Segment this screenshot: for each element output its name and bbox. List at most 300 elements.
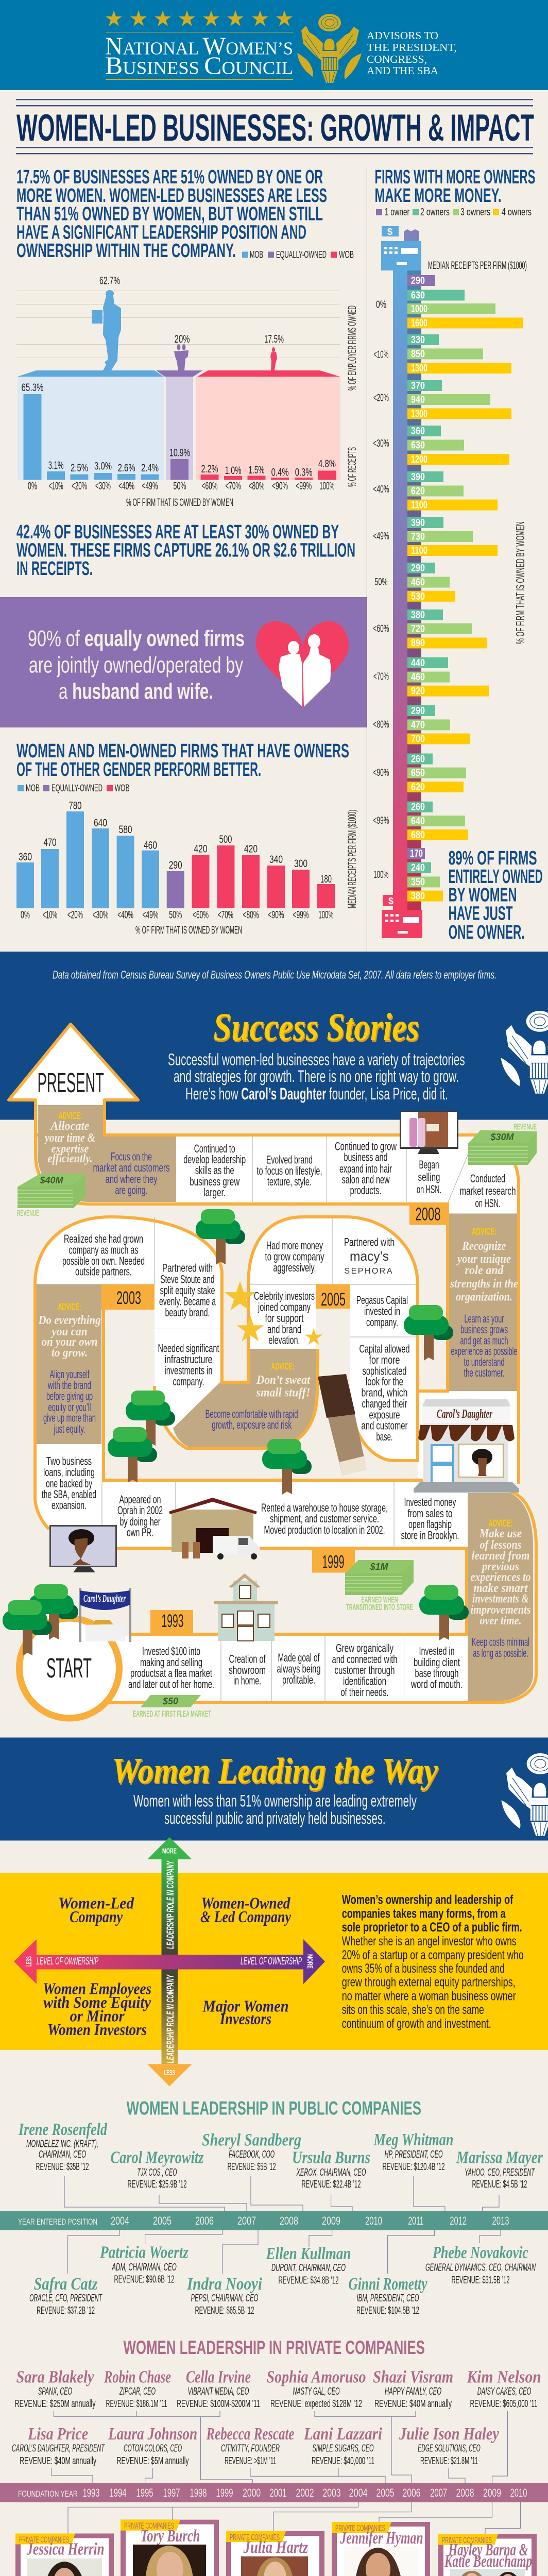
steps: bottom row: showroom <box>229 1664 266 1676</box>
x axis labels: <99% <box>296 480 312 492</box>
card: Julia Hartz <box>226 2531 339 2576</box>
timeline band: 2008 <box>456 2486 474 2499</box>
steps: second dome: aggressively. <box>273 1261 316 1274</box>
group labels: <99% <box>373 815 389 826</box>
heading: public companies: WOMEN LEADERSHIP IN PUBLIC COMPANIES <box>127 2098 421 2119</box>
year: 1999: 1999 <box>322 1552 344 1572</box>
bar values: 370 <box>411 380 425 392</box>
Kim Nelson <box>466 2368 541 2410</box>
x axis labels: <10% <box>49 480 63 492</box>
advice: allocate your time: and where they <box>105 1173 158 1185</box>
advice: recognize your role: role and <box>465 1264 504 1277</box>
timeline band: 2009 <box>322 2214 340 2227</box>
Ginni Rometty: IBM, PRESIDENT, CEO <box>356 2293 419 2304</box>
card: Hayley Barna and Katie Beauchamp: PRIVATE COMPANIES <box>442 2535 492 2545</box>
Rebecca Rescate: Rebecca Rescate <box>206 2425 295 2444</box>
x axis: <30% <box>93 909 108 921</box>
timeline band: 1997 <box>163 2486 180 2499</box>
icon: money stack $30M: $30M <box>490 1132 515 1142</box>
x axis labels: <20% <box>72 480 87 492</box>
bar values: 4.8% <box>318 458 336 470</box>
top row steps: on HSN. <box>475 1197 501 1210</box>
card: Jessica Herrin <box>15 2534 135 2576</box>
bar values: 440 <box>411 657 425 669</box>
icon: flea market stand <box>79 1588 131 1642</box>
advice: do everything: on your own <box>41 1335 98 1349</box>
Carol Meyrowitz: TJX COS., CEO <box>137 2167 177 2178</box>
bar values: 260 <box>411 753 425 765</box>
Safra Catz: Safra Catz <box>34 2275 98 2294</box>
steps: middle row <box>42 1455 459 1541</box>
pictogram: MOB figure: 62.7% <box>99 275 120 287</box>
card: Jennifer Hyman <box>332 2522 438 2576</box>
legend: owner counts: 4 owners <box>502 207 532 218</box>
Rebecca Rescate: CITIKITTY, FOUNDER <box>221 2443 280 2454</box>
bar values: 940 <box>411 394 425 405</box>
arrow: ownership axis: LEVEL OF OWNERSHIP <box>241 1956 302 1967</box>
intro text <box>168 1050 465 1103</box>
steps: first dome: Realized she had grown <box>64 1232 143 1245</box>
bar values: 700 <box>411 734 425 745</box>
steps: first dome: company. <box>173 1375 204 1388</box>
timeline band: 1993 <box>82 2486 100 2499</box>
group labels: <49% <box>373 531 389 542</box>
steps: first dome: evenly. Became a <box>159 1295 216 1308</box>
card: Julia Hartz: Julia Hartz <box>243 2538 309 2557</box>
intro text: Here’s how Carol’s Daughter founder, Lisa Price, did it. <box>185 1084 448 1103</box>
Robin Chase: ZIPCAR, CEO <box>119 2386 156 2397</box>
board panels <box>37 1105 533 1701</box>
chart: median receipts by number of owners <box>373 226 527 938</box>
quadrant labels: with Some Equity <box>43 1993 151 2011</box>
advice: don't sweat: small stuff! <box>256 1386 310 1400</box>
bar values: 390 <box>411 517 425 529</box>
bar values: 620 <box>411 485 425 497</box>
values <box>19 800 332 885</box>
pictogram: equally-owned couple <box>174 333 190 370</box>
advice: recognize your role: the customer. <box>464 1366 505 1379</box>
icon: trees <box>3 1209 469 1656</box>
advice: do everything: ADVICE: <box>58 1302 81 1313</box>
values: 580 <box>119 824 132 836</box>
steps: middle row: expansion. <box>52 1499 87 1512</box>
icon: white eagle seal <box>501 1011 548 1094</box>
steps: bottom row: base through <box>415 1667 458 1680</box>
steps: bottom row: identification <box>343 1675 386 1688</box>
bar values: 380 <box>411 609 425 621</box>
x axis labels: <40% <box>118 480 134 492</box>
Cella Irvine: VIBRANT MEDIA, CEO <box>187 2386 249 2397</box>
x axis: 50% <box>169 909 182 921</box>
group labels: <40% <box>373 484 389 495</box>
quadrant labels: Women Employees <box>43 1979 151 1998</box>
panel: husband and wife <box>0 597 367 727</box>
icon: money stack $1M: TRANSITIONED INTO STORE <box>346 1602 413 1612</box>
steps: second dome: invested in <box>364 1304 400 1318</box>
x axis labels: 100% <box>319 480 335 492</box>
timeline band: 2007 <box>430 2486 447 2499</box>
advisors text: THE PRESIDENT, <box>367 41 457 54</box>
Shazi Visram: REVENUE: $40M annually <box>374 2398 452 2410</box>
steps: middle row: own PR. <box>127 1526 153 1539</box>
icon: money $50 <box>133 1695 211 1719</box>
group labels: 50% <box>375 577 388 588</box>
values: 780 <box>69 800 81 812</box>
text block: 17.5% of businesses: MORE WOMEN. WOMEN-LED BUSINESSES ARE LESS <box>16 185 327 207</box>
Ellen Kullman <box>266 2244 351 2286</box>
icon: money stack $1M: EARNED WHEN <box>362 1595 398 1605</box>
top row steps: market research <box>459 1184 516 1197</box>
Sophia Amoruso: Sophia Amoruso <box>267 2368 366 2387</box>
steps: bottom row: in home. <box>233 1674 261 1687</box>
x axis: <99% <box>293 909 309 921</box>
advice: do everything: you can <box>50 1325 88 1338</box>
bar values: 390 <box>411 471 425 483</box>
light green bars <box>407 303 495 887</box>
values: 290 <box>169 859 182 871</box>
bar values: 1.5% <box>248 464 265 476</box>
x axis: <10% <box>43 909 57 921</box>
Laura Johnson: COTON COLORS, CEO <box>124 2443 182 2454</box>
steps: first dome: Steve Stoute and <box>161 1273 214 1286</box>
bar values: 530 <box>411 591 425 602</box>
year: 2003: 2003 <box>116 1288 141 1308</box>
year: 2003 <box>101 1284 155 1310</box>
steps: middle row: from sales to <box>408 1507 452 1520</box>
Julie Ison Haley: EDGE SOLUTIONS, CEO <box>418 2443 481 2454</box>
dividers <box>37 1137 517 1701</box>
advice: recognize your role: Learn as your <box>465 1312 504 1325</box>
group labels: <60% <box>373 623 389 634</box>
icon: flea market stand: Carol’s Daughter <box>83 1593 126 1604</box>
Robin Chase <box>104 2368 171 2410</box>
Rebecca Rescate: REVENUE: >$1M ’11 <box>225 2455 276 2467</box>
values: 420 <box>244 843 258 855</box>
group labels: <30% <box>373 438 389 449</box>
explanatory paragraph <box>342 1893 524 2031</box>
Sara Blakely: REVENUE: $250M annually <box>14 2398 96 2410</box>
advice: do everything: equity or you’ll <box>48 1401 91 1414</box>
top row steps: products. <box>350 1184 381 1197</box>
legend: ownership type 2 <box>18 783 130 794</box>
bar values: 640 <box>411 816 425 827</box>
Irene Rosenfeld: REVENUE: $35B ’12 <box>36 2161 89 2173</box>
values: 460 <box>144 840 157 851</box>
steps: second dome <box>254 1236 410 1443</box>
green bars <box>407 290 465 873</box>
text block: 42.4% of businesses: 42.4% OF BUSINESSES ARE AT LEAST 30% OWNED BY <box>16 521 339 543</box>
advice: make use of lessons: experiences to <box>471 1570 530 1584</box>
timeline band: 2004 <box>111 2214 129 2227</box>
Indra Nooyi: REVENUE: $65.5B ’12 <box>195 2305 254 2316</box>
timeline: public companies <box>0 2120 548 2316</box>
text block: 17.5% of businesses: OWNERSHIP WITHIN THE COMPANY. <box>16 240 236 262</box>
year: 2005 <box>316 1284 350 1310</box>
icon: money stack $40M: REVENUE <box>17 1208 39 1218</box>
steps: middle row: one backed by <box>46 1477 92 1490</box>
steps: first dome: split equity stake <box>160 1284 215 1297</box>
advice: recognize your role: your unique <box>456 1252 511 1266</box>
bar values: 1600 <box>411 317 427 329</box>
quadrant labels: & Led Company <box>200 1907 292 1926</box>
card: Hayley Barna and Katie Beauchamp <box>438 2534 548 2576</box>
Ellen Kullman: Ellen Kullman <box>266 2244 351 2263</box>
bar values: 2.2% <box>201 463 218 475</box>
steps: second dome: Celebrity investors <box>254 1290 315 1302</box>
Safra Catz: ORACLE, CFO, PRESIDENT <box>29 2293 102 2304</box>
photo: Jennifer Hyman <box>344 2547 418 2576</box>
top row steps: texture, style. <box>267 1175 312 1188</box>
x axis: <20% <box>67 909 83 921</box>
top row steps: Conducted <box>470 1172 505 1185</box>
explanatory paragraph: sits on this scale, she’s on the same <box>342 2003 484 2017</box>
pictogram: MOB figure <box>92 275 121 370</box>
x axis labels: <60% <box>202 480 217 492</box>
advice: don't sweat: ADVICE: <box>271 1361 295 1372</box>
advice: allocate your time: efficiently. <box>47 1152 93 1165</box>
icon: money $50: $50 <box>162 1696 178 1706</box>
x axis labels: <90% <box>272 480 288 492</box>
chart: median receipts by number of owners: % OF FIRM THAT IS OWNED BY WOMEN <box>513 521 527 644</box>
Julie Ison Haley <box>399 2425 500 2467</box>
advice: recognize your role: organization. <box>456 1291 512 1304</box>
cash register column: $ <box>388 896 393 906</box>
Cella Irvine <box>177 2368 260 2410</box>
x axis: <80% <box>243 909 259 921</box>
values: 640 <box>94 817 107 829</box>
arrow: leadership axis: LESS <box>164 2069 175 2077</box>
arrow: ownership axis <box>14 1939 325 1984</box>
x axis labels: <70% <box>226 480 241 492</box>
values: 420 <box>194 843 207 855</box>
pictogram: WOB figure: 17.5% <box>264 333 284 345</box>
steps: second dome: company. <box>366 1316 398 1329</box>
Shazi Visram: Shazi Visram <box>373 2368 453 2387</box>
advice: make use of lessons <box>471 1518 530 1659</box>
rotated axis titles <box>346 306 358 487</box>
card: Tory Burch <box>121 2520 226 2576</box>
arrow: leadership axis <box>147 1837 192 2087</box>
advice: do everything: Align yourself <box>49 1368 90 1381</box>
steps: first dome: infrastructure <box>165 1353 212 1366</box>
bar values: 650 <box>411 768 425 779</box>
steps: first dome: outside partners. <box>75 1265 132 1278</box>
advice: allocate your time <box>44 1111 170 1196</box>
steps: middle row: by doing her <box>119 1515 161 1528</box>
timeline band: 2012 <box>450 2214 467 2227</box>
Cella Irvine: Cella Irvine <box>186 2368 251 2387</box>
Lani Lazzari: REVENUE: $40,000 ’11 <box>312 2455 374 2467</box>
Robin Chase: REVENUE: $186.1M ’11 <box>106 2398 167 2410</box>
steps: middle row: Rented a warehouse to house storage, <box>261 1501 388 1514</box>
steps: bottom row: and later out of her home. <box>128 1678 214 1691</box>
steps: second dome: Had more money <box>266 1239 323 1252</box>
arrow: ownership axis: MORE <box>305 1954 314 1969</box>
advice: allocate your time: market and customers <box>93 1161 170 1174</box>
text block: 17.5% of businesses: THAN 51% OWNED BY WOMEN, BUT WOMEN STILL <box>16 203 323 225</box>
bar values: 720 <box>411 623 425 635</box>
x axis: <90% <box>268 909 284 921</box>
x axis: 100% <box>318 909 334 921</box>
arrow: ownership axis: LEVEL OF OWNERSHIP <box>37 1956 98 1967</box>
timeline band: 2001 <box>270 2486 286 2499</box>
top row steps: salon and new <box>342 1173 390 1186</box>
steps: first dome: investments in <box>165 1364 212 1377</box>
Patricia Woertz <box>99 2243 189 2285</box>
section banner: women leading the way <box>0 1737 548 1840</box>
steps: second dome: brand, which <box>362 1386 408 1399</box>
steps: second dome: for support <box>265 1312 304 1325</box>
bar values: 850 <box>411 348 425 360</box>
Marissa Mayer <box>456 2148 543 2190</box>
card: Jennifer Hyman: Jennifer Hyman <box>340 2529 423 2548</box>
timeline band: 2002 <box>296 2486 314 2499</box>
top row steps: larger. <box>203 1186 226 1199</box>
steps: second dome: Capital allowed <box>359 1343 410 1355</box>
advice: make use of lessons: previous <box>481 1560 519 1573</box>
bar values: 1200 <box>411 454 427 465</box>
Ursula Burns <box>292 2148 370 2190</box>
yellow bars <box>407 317 523 902</box>
bar values: 890 <box>411 638 425 649</box>
logo wordmark: NATIONAL WOMEN’S <box>105 32 293 60</box>
timeline: private companies <box>0 2368 548 2534</box>
Julie Ison Haley: Julie Ison Haley <box>399 2425 500 2444</box>
bar values: 620 <box>411 782 425 793</box>
top row steps: to focus on lifestyle, <box>256 1164 322 1177</box>
advice: allocate your time: Focus on the <box>111 1150 152 1163</box>
Ginni Rometty <box>348 2275 427 2316</box>
group labels: <20% <box>373 393 389 404</box>
Lisa Price: CAROL’S DAUGHTER, PRESIDENT <box>12 2443 105 2454</box>
bar values: 290 <box>411 705 425 717</box>
Shazi Visram <box>373 2368 453 2410</box>
bar values: 350 <box>411 876 425 888</box>
card: Jennifer Hyman: PRIVATE COMPANIES <box>335 2523 385 2533</box>
steps: second dome: joined company <box>258 1301 311 1314</box>
photo: Julia Hartz <box>241 2556 308 2576</box>
x axis labels: 50% <box>173 480 186 492</box>
text block: 17.5% of businesses <box>16 166 327 262</box>
timeline band: 2005 <box>153 2214 172 2227</box>
advice: recognize your role: business grows <box>460 1323 508 1336</box>
callout text <box>28 626 245 704</box>
steps: bottom row: productsat a flea market <box>130 1667 212 1680</box>
text block: 17.5% of businesses: 17.5% OF BUSINESSES ARE 51% OWNED BY ONE OR <box>16 166 323 188</box>
advisors text: AND THE SBA <box>367 64 438 77</box>
timeline band: 2005 <box>376 2486 395 2499</box>
icon: warehouse and truck <box>169 1498 260 1560</box>
advice: allocate your time: ADVICE: <box>59 1111 82 1122</box>
bar values: 65.3% <box>22 382 43 394</box>
x axis: <40% <box>117 909 133 921</box>
logo wordmark: BUSINESS COUNCIL <box>105 52 293 80</box>
pictogram: equally-owned couple: 20% <box>174 333 190 345</box>
icon: Oprah monitor <box>49 1525 117 1572</box>
advice: don't sweat: growth, exposure and risk <box>212 1418 292 1431</box>
Patricia Woertz: Patricia Woertz <box>99 2243 189 2262</box>
Lisa Price: REVENUE: $40M annually <box>20 2455 96 2467</box>
top row steps: on HSN. <box>417 1183 441 1196</box>
timeline band: 2010 <box>510 2486 527 2499</box>
advice: make use of lessons: investments & <box>472 1592 529 1606</box>
bar values: 630 <box>411 290 425 301</box>
x axis: 0% <box>21 909 30 921</box>
steps: bottom row: profitable. <box>282 1673 315 1686</box>
timeline band: 2004 <box>349 2486 368 2499</box>
subtitle: successful public and privately held businesses. <box>164 1809 385 1827</box>
Irene Rosenfeld <box>18 2120 108 2173</box>
x axis <box>21 909 334 936</box>
legend: ownership type: MOB <box>250 250 263 261</box>
bar values: 1300 <box>411 408 427 419</box>
Laura Johnson: Laura Johnson <box>108 2425 197 2444</box>
steps: bottom row: customer through <box>335 1664 395 1676</box>
values: 360 <box>19 851 32 863</box>
advice: do everything: with the brand <box>47 1379 91 1392</box>
year: 1993 <box>150 1610 193 1634</box>
Indra Nooyi: PEPSI, CHAIRMAN, CEO <box>191 2293 259 2304</box>
timeline band: 2000 <box>243 2486 261 2499</box>
values: 500 <box>219 834 232 845</box>
advice: do everything: give up more than <box>43 1412 96 1425</box>
Sheryl Sandberg: FACEBOOK, COO <box>229 2149 275 2160</box>
timeline band: 1994 <box>109 2486 127 2499</box>
year: 1993: 1993 <box>162 1611 183 1631</box>
bar values: 330 <box>411 334 425 346</box>
chart: employer firms and receipts by percent women-owned <box>16 275 358 509</box>
group labels: 0% <box>376 299 386 310</box>
timeline band: 1998 <box>190 2486 207 2499</box>
steps: middle row: open flagship <box>408 1518 452 1531</box>
steps: middle row: Moved production to location in 2002. <box>264 1523 385 1536</box>
connectors <box>52 2411 520 2534</box>
Sophia Amoruso: NASTY GAL, CEO <box>293 2386 340 2397</box>
top row steps: Began <box>419 1158 439 1171</box>
start circle <box>20 1618 119 1718</box>
quadrant labels: Company <box>70 1907 123 1926</box>
advice: make use of lessons: improvements <box>471 1603 530 1617</box>
group labels: 100% <box>374 869 389 880</box>
Irene Rosenfeld: Irene Rosenfeld <box>18 2120 108 2139</box>
year: 2008: 2008 <box>415 1205 441 1224</box>
advisors text: ADVISORS TO <box>367 29 438 42</box>
section banner: success stories <box>0 952 548 1120</box>
x axis labels <box>28 480 335 509</box>
Safra Catz <box>29 2275 102 2316</box>
bar values: 1300 <box>411 363 427 374</box>
card: Tory Burch: Tory Burch <box>140 2527 200 2546</box>
timeline band: 2006 <box>195 2214 214 2227</box>
arrow: ownership axis: LESS <box>25 1956 33 1967</box>
Carol Meyrowitz: REVENUE: $25.9B ’12 <box>128 2179 186 2190</box>
text block: 42.4% of businesses: IN RECEIPTS. <box>16 558 93 580</box>
steps: middle row: Two business <box>46 1455 92 1468</box>
timeline band <box>0 2483 548 2502</box>
steps: middle row: store in Brooklyn. <box>401 1529 459 1541</box>
steps: bottom row: Grew organically <box>336 1641 393 1654</box>
icon: heart with couple <box>256 621 349 707</box>
purple bars <box>407 275 435 859</box>
board game timeline <box>3 1024 537 1719</box>
values: 470 <box>43 837 57 849</box>
values: 340 <box>269 854 283 866</box>
icon: storefront <box>414 1398 519 1493</box>
quadrant labels: Major Women <box>202 1997 288 2015</box>
bar values <box>22 382 336 478</box>
timeline band: 1995 <box>136 2486 153 2499</box>
card: Julia Hartz: PRIVATE COMPANIES <box>230 2533 280 2542</box>
